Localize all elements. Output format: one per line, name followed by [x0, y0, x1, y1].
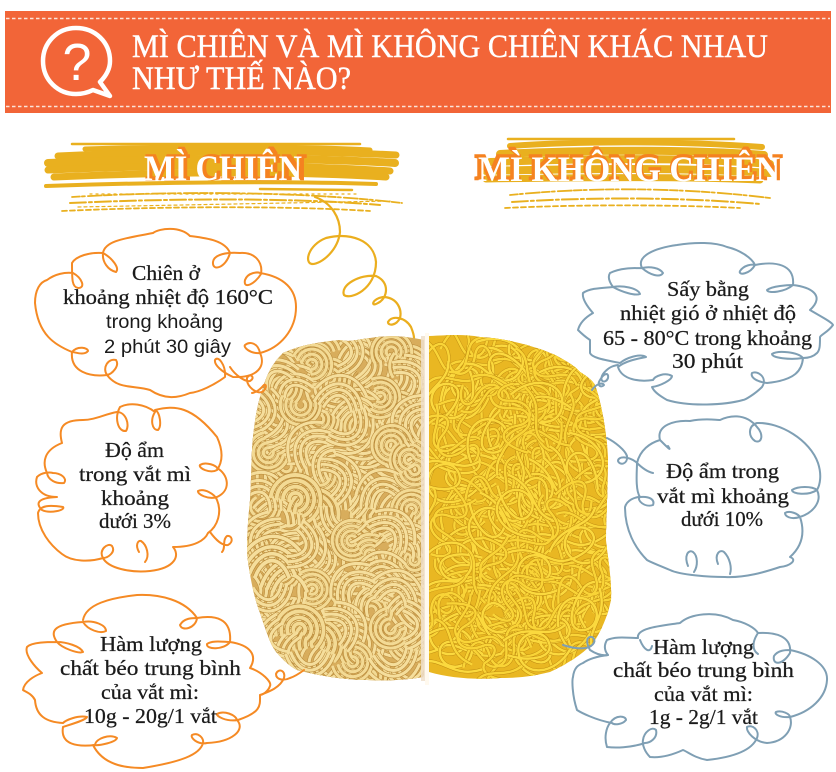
bubble text: Hàm lượng	[653, 635, 755, 659]
bubble text: chất béo trung bình	[60, 656, 242, 680]
bubble text: khoảng nhiệt độ 160°C	[63, 285, 273, 309]
bubble text: của vắt mì:	[654, 682, 753, 706]
bubble tail	[260, 670, 304, 695]
bubble: moisture under 3%	[36, 404, 232, 571]
bubble: fat content fried	[23, 595, 304, 768]
bubble text: chất béo trung bình	[613, 658, 795, 682]
cloud outline	[625, 416, 820, 577]
heading text: mì không chiên: MÌ KHÔNG CHIÊN	[478, 149, 780, 189]
heading: mì không chiên with brush stroke	[475, 139, 782, 208]
bubble text: 65 - 80°C trong khoảng	[603, 326, 813, 350]
heading text: mì chiên: MÌ CHIÊN	[144, 148, 302, 188]
bubble text: 10g - 20g/1 vắt	[84, 704, 217, 728]
bubble text	[657, 459, 790, 531]
small inner bottom loop	[137, 541, 148, 562]
bubble: moisture under 10%	[607, 416, 820, 577]
bubble text: dưới 3%	[99, 509, 171, 533]
bubble text: Độ ẩm	[105, 438, 164, 462]
heading text: mì chiên: MÌ CHIÊN	[146, 147, 306, 187]
bubble text: nhiệt gió ở nhiệt độ	[620, 301, 796, 325]
white divider between halves	[421, 333, 429, 685]
bubble tail	[563, 637, 608, 655]
bubble tail	[230, 367, 266, 393]
bubble text: của vắt mì:	[101, 680, 199, 704]
bubble text	[60, 632, 242, 728]
brush stroke: right	[486, 139, 770, 208]
icon: question speech bubble: ?	[63, 34, 91, 92]
bubble text	[603, 277, 813, 373]
bubble text: vắt mì khoảng	[657, 484, 790, 508]
connector squiggle from heading to noodles	[308, 197, 414, 338]
bubble text: Chiên ở	[132, 261, 201, 285]
title text	[132, 27, 768, 97]
title text: NHƯ THẾ NÀO?	[132, 59, 351, 97]
bubble text: Hàm lượng	[100, 632, 203, 656]
bubble tail	[210, 532, 232, 552]
bubble text	[79, 438, 191, 533]
icon: question speech bubble	[43, 28, 110, 96]
bubble text: trong vắt mì	[79, 462, 191, 486]
bubble: air drying temperature	[578, 243, 833, 405]
cloud outline	[572, 614, 827, 760]
cloud outline	[23, 595, 270, 768]
cloud outline	[578, 243, 833, 405]
title banner	[5, 11, 831, 113]
bubble text	[613, 635, 795, 729]
noodles: fried half	[247, 336, 424, 680]
bubble text: 1g - 2g/1 vắt	[649, 705, 758, 729]
noodles: air-dried half	[429, 335, 612, 679]
heading: mì chiên with brush stroke	[46, 144, 402, 211]
bubble text: 30 phút	[672, 349, 743, 373]
brush stroke: left	[46, 144, 402, 211]
small inner bottom loops	[686, 551, 731, 574]
bubble tail	[592, 365, 618, 390]
cloud outline	[36, 404, 227, 571]
bubble text: dưới 10%	[681, 507, 763, 531]
title text: MÌ CHIÊN VÀ MÌ KHÔNG CHIÊN KHÁC NHAU	[132, 27, 768, 65]
bubble text	[63, 261, 273, 358]
bubble: frying temperature	[35, 229, 296, 397]
cloud outline	[35, 229, 296, 397]
inner top-right arc	[640, 633, 758, 654]
bubble text: trong khoảng	[106, 312, 223, 333]
heading text: mì không chiên: MÌ KHÔNG CHIÊN	[475, 147, 782, 187]
bubble text: 2 phút 30 giây	[104, 337, 232, 358]
bubble text: khoảng	[101, 486, 170, 510]
bubble text: Sấy bằng	[667, 277, 750, 301]
bubble text: Độ ẩm trong	[666, 459, 780, 483]
bubble tail	[607, 438, 653, 473]
bubble: fat content air dried	[563, 614, 827, 760]
noodle photo: fried and air-dried halves	[247, 333, 612, 685]
